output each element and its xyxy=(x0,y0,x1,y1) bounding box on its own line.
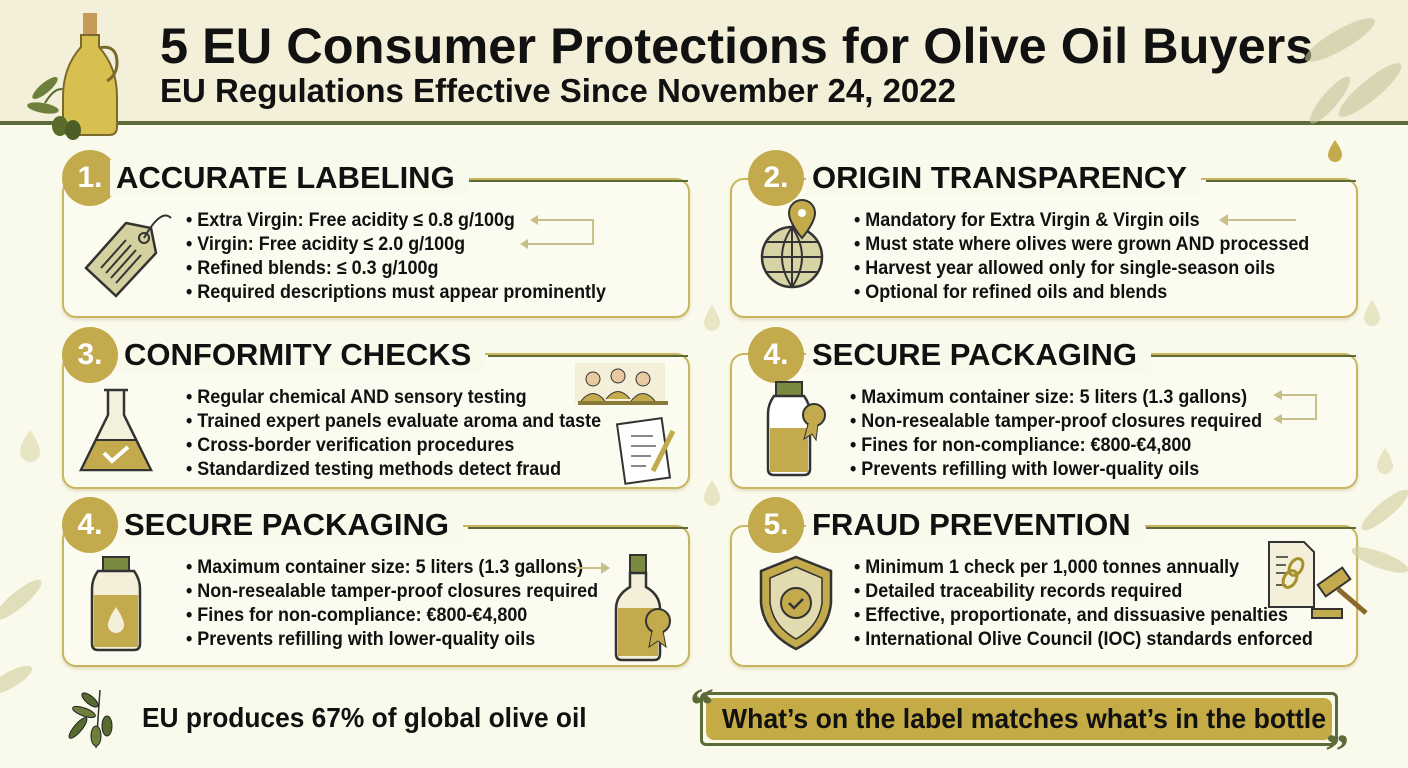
bullets: Fines for non-compliance: €800-€4,800 xyxy=(861,434,1191,456)
panel 5: fraud prevention: 5. xyxy=(763,508,789,541)
heading: SECURE PACKAGING xyxy=(812,337,1137,372)
bullets: Regular chemical AND sensory testing xyxy=(197,386,527,408)
bullets: Prevents refilling with lower-quality oils xyxy=(861,458,1199,480)
arrow xyxy=(1219,214,1296,226)
bullets xyxy=(186,386,601,480)
arrow xyxy=(1273,390,1317,424)
bullets: Harvest year allowed only for single-season oils xyxy=(865,257,1275,279)
bullets xyxy=(854,556,1313,650)
panel 1: accurate labeling: 1. xyxy=(77,161,103,194)
bullets: Prevents refilling with lower-quality oils xyxy=(197,628,535,650)
quote callout: “ xyxy=(690,679,714,732)
icon: expert panel & document xyxy=(575,363,676,485)
bullets: Effective, proportionate, and dissuasive penalties xyxy=(865,604,1288,626)
title: 5 EU Consumer Protections for Olive Oil Buyers xyxy=(160,18,1313,74)
heading: SECURE PACKAGING xyxy=(124,507,449,542)
icon: tag xyxy=(84,214,172,298)
bullets: Refined blends: ≤ 0.3 g/100g xyxy=(197,257,438,279)
bullets xyxy=(186,209,606,303)
panel 3: conformity checks xyxy=(60,327,692,492)
arrow xyxy=(520,215,594,249)
panel 3: conformity checks: 3. xyxy=(77,338,103,371)
panel 2: origin transparency xyxy=(728,150,1360,322)
icon: bottle with award xyxy=(614,554,671,662)
icon: flask xyxy=(79,388,153,472)
stat text: EU produces 67% of global olive oil xyxy=(142,702,587,733)
icon: oil bottle with drop xyxy=(90,556,142,652)
panel 4: secure packaging (left) xyxy=(60,497,692,670)
bullets: Trained expert panels evaluate aroma and taste xyxy=(197,410,601,432)
icon: olive oil bottle xyxy=(27,13,118,140)
bullets: Standardized testing methods detect fraud xyxy=(197,458,561,480)
bullets: Fines for non-compliance: €800-€4,800 xyxy=(197,604,527,626)
panel 4: secure packaging (left): 4. xyxy=(77,508,103,541)
bullets: Extra Virgin: Free acidity ≤ 0.8 g/100g xyxy=(197,209,515,231)
bullets: Mandatory for Extra Virgin & Virgin oils xyxy=(865,209,1200,231)
panel 4: secure packaging (right): 4. xyxy=(763,338,789,371)
bullets xyxy=(850,386,1262,480)
panel 5: fraud prevention xyxy=(728,497,1368,670)
heading: ORIGIN TRANSPARENCY xyxy=(812,160,1187,195)
bullets: Maximum container size: 5 liters (1.3 gallons) xyxy=(197,556,583,578)
icon: globe with pin xyxy=(760,199,824,288)
bullets: Required descriptions must appear prominently xyxy=(197,281,606,303)
bullets xyxy=(854,209,1309,303)
subtitle: EU Regulations Effective Since November 24, 2022 xyxy=(160,72,956,109)
header band xyxy=(0,0,1408,125)
decorative leaves right xyxy=(1305,18,1402,124)
quote callout xyxy=(690,679,1349,768)
bullets: Cross-border verification procedures xyxy=(197,434,514,456)
bullets: Optional for refined oils and blends xyxy=(865,281,1167,303)
icon: shield xyxy=(760,556,832,650)
heading: CONFORMITY CHECKS xyxy=(124,337,471,372)
bullets: International Olive Council (IOC) standards enforced xyxy=(865,628,1313,650)
arrow xyxy=(575,562,610,574)
bullets: Virgin: Free acidity ≤ 2.0 g/100g xyxy=(197,233,465,255)
panel 4: secure packaging (right) xyxy=(728,327,1360,492)
bullets: Detailed traceability records required xyxy=(865,580,1182,602)
panel 2: origin transparency: 2. xyxy=(763,161,789,194)
icon: jar with seal xyxy=(766,381,826,476)
icon: document and gavel xyxy=(1268,541,1368,619)
icon: olive branch xyxy=(68,690,112,748)
bullets: Maximum container size: 5 liters (1.3 gallons) xyxy=(861,386,1247,408)
heading: ACCURATE LABELING xyxy=(116,160,455,195)
bullets: Minimum 1 check per 1,000 tonnes annually xyxy=(865,556,1239,578)
bullets: Must state where olives were grown AND processed xyxy=(865,233,1309,255)
bullets: Non-resealable tamper-proof closures required xyxy=(197,580,598,602)
bullets: Non-resealable tamper-proof closures required xyxy=(861,410,1262,432)
panel 1: accurate labeling xyxy=(60,150,692,322)
heading: FRAUD PREVENTION xyxy=(812,507,1131,542)
bullets xyxy=(186,556,598,650)
quote callout: What’s on the label matches what’s in the bottle xyxy=(722,703,1326,734)
